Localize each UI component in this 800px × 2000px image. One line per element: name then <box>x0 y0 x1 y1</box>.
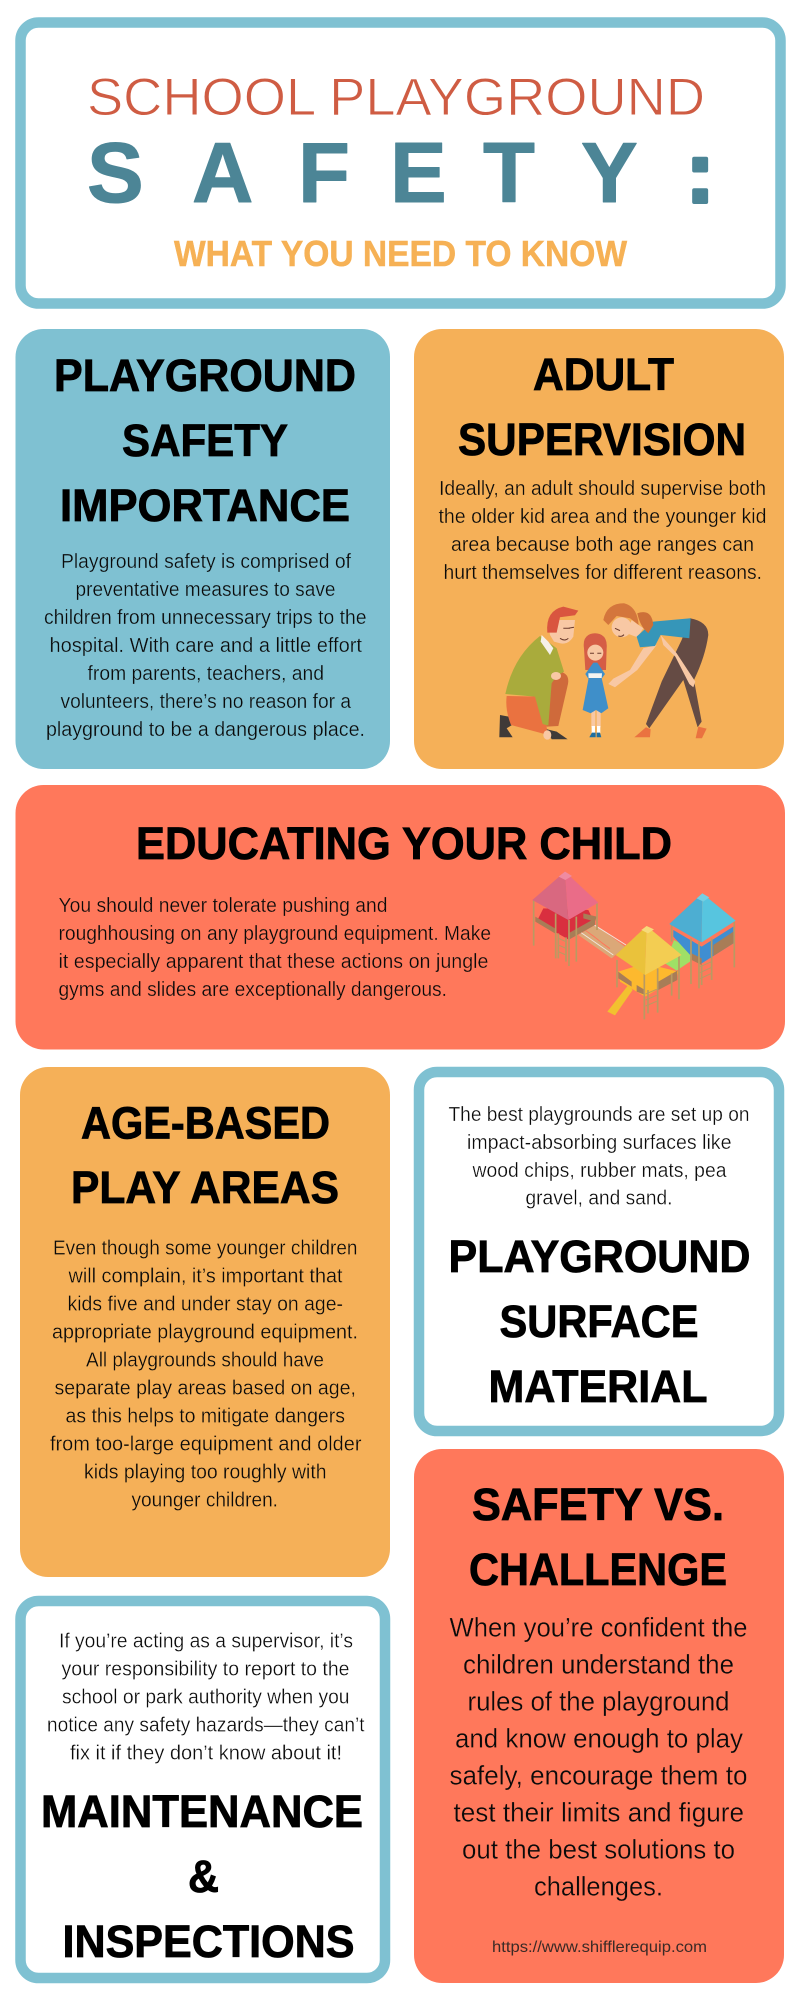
heading: PLAYGROUND <box>54 350 356 401</box>
body text: kids playing too roughly with <box>84 1462 326 1484</box>
heading <box>71 1098 339 1213</box>
panel: title banner <box>20 22 780 304</box>
panel: adult supervision <box>414 329 784 769</box>
body text <box>50 1238 362 1512</box>
body text: The best playgrounds are set up on <box>448 1104 750 1126</box>
body text: and know enough to play <box>455 1724 743 1754</box>
blue house <box>669 893 736 988</box>
heading: PLAYGROUND <box>448 1231 750 1282</box>
body text: Playground safety is comprised of <box>61 551 351 573</box>
child <box>583 633 608 737</box>
panel: maintenance and inspections <box>20 1601 385 1978</box>
body text <box>438 478 766 584</box>
body text <box>450 1612 748 1902</box>
body text: playground to be a dangerous place. <box>46 719 365 741</box>
woman bending <box>603 603 708 738</box>
green tube <box>665 940 691 971</box>
panel: playground surface material <box>419 1072 779 1431</box>
rope bridge <box>577 923 626 958</box>
body text <box>47 1630 365 1764</box>
panel background <box>16 329 390 769</box>
panel: age-based play areas <box>20 1067 390 1577</box>
heading: & <box>188 1851 219 1902</box>
heading: MATERIAL <box>488 1361 708 1412</box>
heading <box>469 1479 727 1595</box>
subtitle: WHAT YOU NEED TO KNOW <box>174 233 627 274</box>
source url: https://www.shifflerequip.com <box>492 1939 707 1956</box>
body text: safely, encourage them to <box>450 1760 748 1790</box>
heading: SAFETY VS. <box>472 1479 724 1530</box>
title: safety: SAFET Y : <box>87 126 714 221</box>
body text: hospital. With care and a little effort <box>50 635 362 657</box>
heading: IMPORTANCE <box>60 480 350 531</box>
banner frame <box>20 22 780 304</box>
body text <box>448 1104 750 1210</box>
heading <box>54 350 356 531</box>
body text: as this helps to mitigate dangers <box>66 1406 345 1428</box>
body text: If you’re acting as a supervisor, it’s <box>59 1630 353 1652</box>
heading: CHALLENGE <box>469 1544 727 1595</box>
body text: You should never tolerate pushing and <box>58 895 388 917</box>
heading: AGE-BASED <box>81 1098 330 1148</box>
heading <box>458 349 746 465</box>
panel: safety vs. challenge <box>414 1449 784 1983</box>
body text: younger children. <box>132 1490 278 1512</box>
body text: your responsibility to report to the <box>62 1658 350 1680</box>
body text: will complain, it’s important that <box>68 1266 343 1288</box>
body text: preventative measures to save <box>76 579 336 601</box>
body text: roughhousing on any playground equipment. Make <box>58 923 491 945</box>
body text: fix it if they don’t know about it! <box>70 1742 342 1764</box>
heading: EDUCATING YOUR CHILD <box>136 818 672 869</box>
yellow house <box>607 926 682 1019</box>
body text <box>44 551 366 741</box>
body text: test their limits and figure <box>454 1798 744 1828</box>
red house <box>532 872 598 966</box>
title: school playground: SCHOOL PLAYGROUND <box>87 68 705 127</box>
body text: challenges. <box>534 1872 663 1902</box>
body text: notice any safety hazards—they can’t <box>47 1714 365 1736</box>
body text: impact-absorbing surfaces like <box>467 1132 732 1154</box>
body text: When you’re confident the <box>450 1612 748 1642</box>
body text: All playgrounds should have <box>86 1350 324 1372</box>
heading: SAFETY <box>122 415 288 466</box>
body text: Even though some younger children <box>53 1238 358 1260</box>
body text: school or park authority when you <box>62 1686 350 1708</box>
heading: PLAY AREAS <box>71 1162 339 1213</box>
body text: wood chips, rubber mats, pea <box>472 1160 727 1182</box>
heading: SUPERVISION <box>458 414 746 465</box>
panel background <box>414 1449 784 1983</box>
body text: the older kid area and the younger kid <box>438 506 766 528</box>
heading: ADULT <box>533 349 674 400</box>
heading: SURFACE <box>500 1296 698 1347</box>
heading <box>448 1231 750 1412</box>
panel background <box>419 1072 779 1431</box>
heading <box>41 1786 363 1967</box>
icon: play structure <box>532 872 736 1019</box>
body text: from parents, teachers, and <box>88 663 324 685</box>
panel: playground safety importance <box>16 329 390 769</box>
body text: gravel, and sand. <box>526 1188 672 1210</box>
body text: gyms and slides are exceptionally dangerous. <box>58 979 447 1001</box>
body text: appropriate playground equipment. <box>52 1322 358 1344</box>
panel background <box>414 329 784 769</box>
panel background <box>20 1601 385 1978</box>
heading: MAINTENANCE <box>41 1786 363 1837</box>
man kneeling <box>499 607 578 740</box>
panel: educating your child <box>16 785 785 1050</box>
panel background <box>20 1067 390 1577</box>
icon: family with child <box>499 603 708 740</box>
body text: Ideally, an adult should supervise both <box>439 478 766 500</box>
body text: volunteers, there’s no reason for a <box>60 691 352 713</box>
body text: out the best solutions to <box>462 1834 735 1864</box>
panel background <box>16 785 785 1050</box>
body text: kids five and under stay on age- <box>68 1294 343 1316</box>
body text: area because both age ranges can <box>451 534 754 556</box>
body text: hurt themselves for different reasons. <box>444 562 762 584</box>
body text: children understand the <box>463 1650 734 1680</box>
body text: rules of the playground <box>468 1686 730 1716</box>
body text <box>58 895 491 1001</box>
heading: INSPECTIONS <box>62 1916 354 1967</box>
body text: separate play areas based on age, <box>54 1378 356 1400</box>
body text: it especially apparent that these actions on jungle <box>58 951 488 973</box>
body text: from too-large equipment and older <box>50 1434 362 1456</box>
body text: children from unnecessary trips to the <box>44 607 366 629</box>
